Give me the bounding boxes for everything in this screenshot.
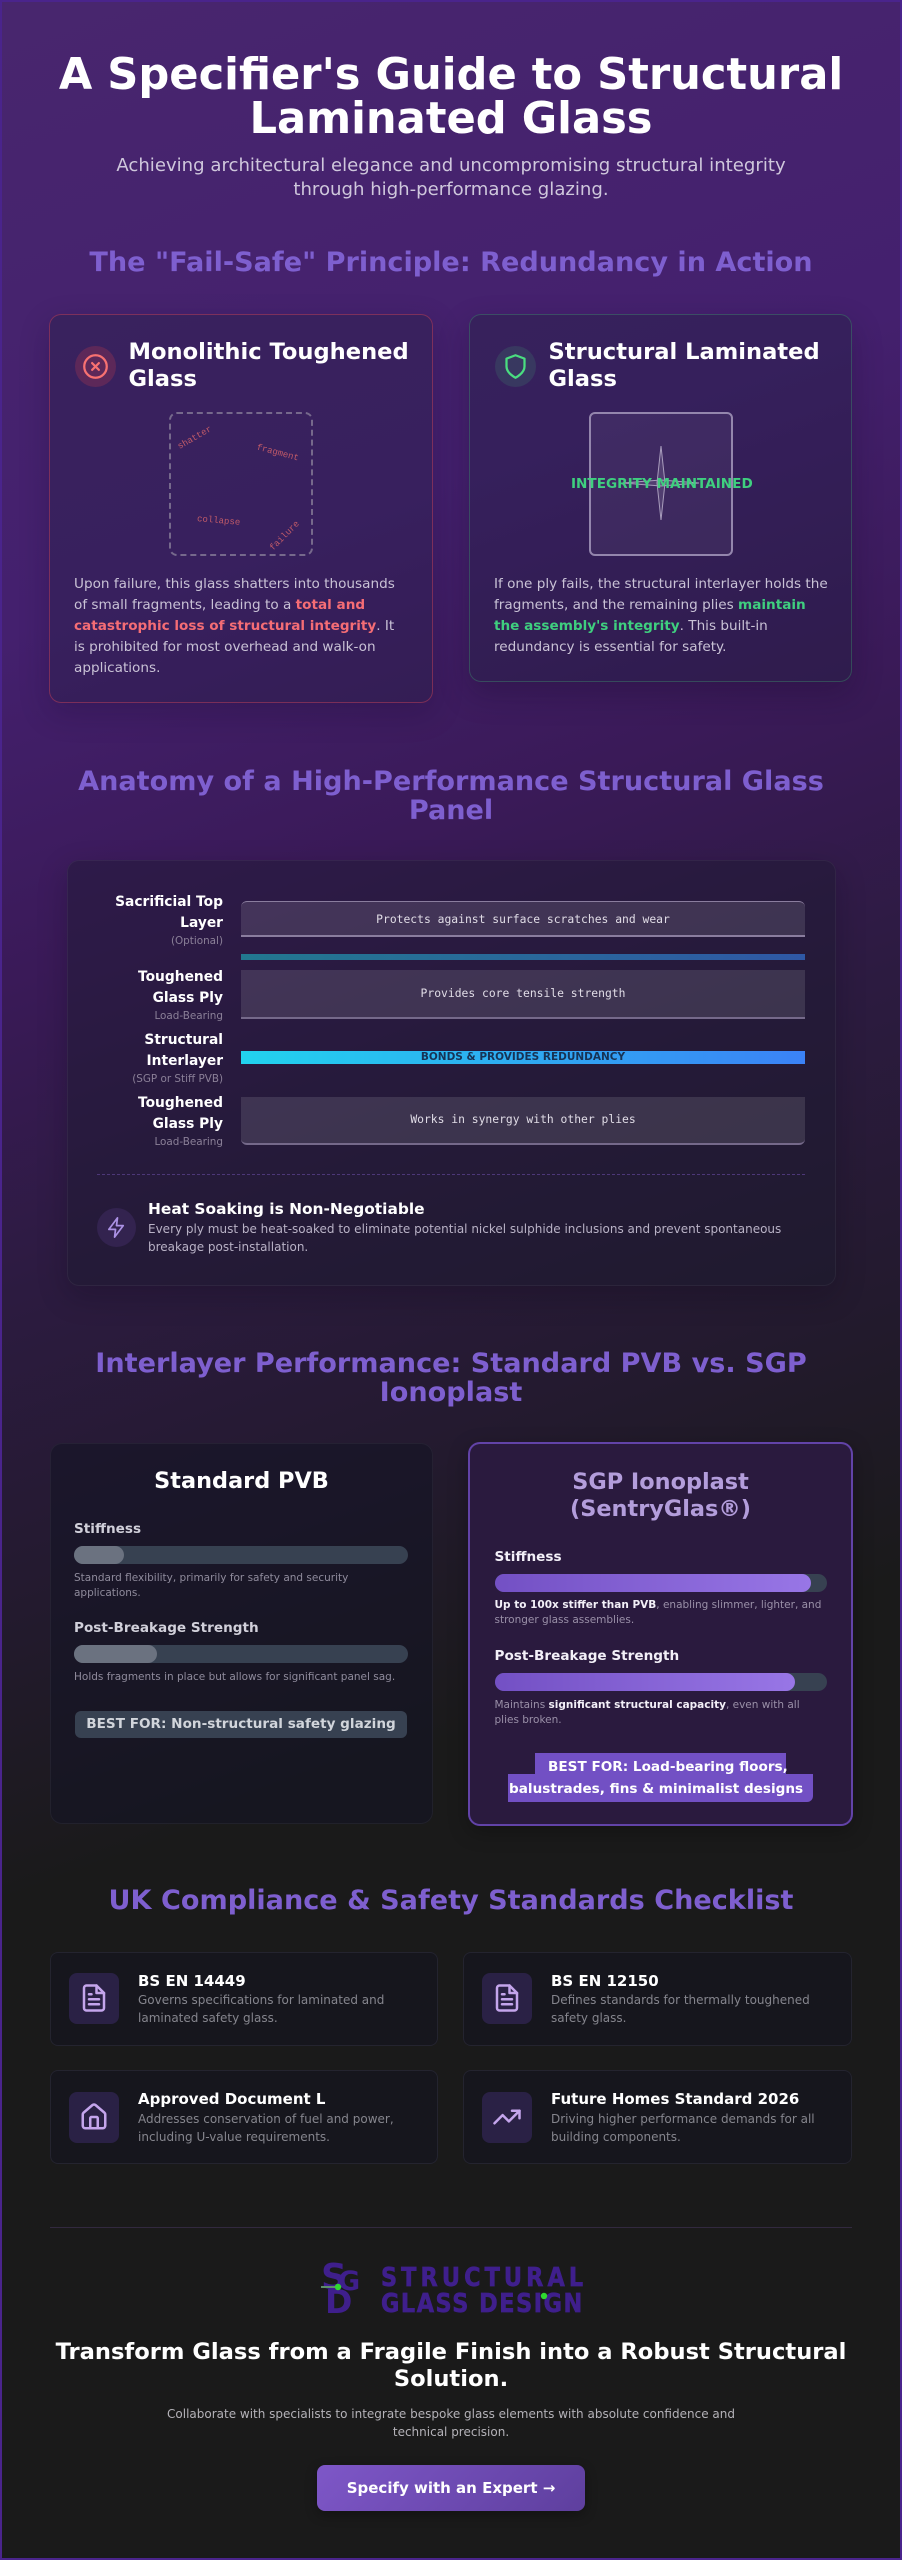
metric note: Maintains significant structural capacity, even with all [494, 1698, 800, 1710]
label: sacrificial top layer [115, 894, 223, 946]
callout text: Every ply must be heat-soaked to eliminate potential nickel sulphide inclusions and prevent spontaneous [148, 1222, 781, 1236]
metric label: post-breakage: Post-Breakage Strength [494, 1648, 679, 1664]
layer: lower ply: Works in synergy with other plies [410, 1112, 636, 1126]
description: If one ply fails, the structural interlayer holds the [494, 576, 828, 592]
description: the assembly's integrity. This built-in [494, 618, 768, 634]
layer: core ply: Provides core tensile strength [421, 986, 625, 1000]
layer: core ply [241, 970, 805, 1019]
heading: anatomy: Panel [409, 794, 493, 826]
bar: post-breakage [74, 1645, 408, 1663]
fragment label: shatter [176, 424, 214, 452]
closing heading: Solution. [394, 2366, 508, 2392]
subtitle [116, 154, 786, 200]
item text [138, 1993, 384, 2025]
label: toughened ply: Load-Bearing [154, 1136, 223, 1148]
badge: best for [75, 1711, 407, 1738]
icon: house [69, 2092, 119, 2143]
item text [138, 2112, 394, 2144]
label: sacrificial top layer: Sacrificial Top [115, 894, 223, 910]
layer: top ply: Protects against surface scratches and wear [376, 912, 670, 926]
icon: document [69, 1973, 119, 2024]
checklist item: BS EN 12150 [463, 1952, 852, 2046]
card title: Monolithic Toughened [128, 339, 409, 365]
panel: structural laminated glass [469, 314, 852, 682]
checklist item: future homes standard [463, 2070, 852, 2164]
callout title: Heat Soaking is Non-Negotiable [148, 1200, 425, 1218]
heading: interlayer performance [95, 1348, 807, 1408]
card title [548, 339, 820, 392]
layer: structural interlayer: BONDS & PROVIDES REDUNDANCY [421, 1051, 625, 1063]
logo: structural glass design: G [338, 2266, 360, 2297]
heading: compliance: UK Compliance & Safety Standards Checklist [109, 1884, 793, 1916]
panel: glass anatomy [67, 860, 836, 1286]
label: structural interlayer [132, 1032, 224, 1084]
description: is prohibited for most overhead and walk-on [74, 638, 376, 654]
label: structural interlayer: Interlayer [147, 1052, 223, 1068]
description: of small fragments, leading to a total and [74, 596, 365, 612]
panel title: (SentryGlas®) [570, 1496, 751, 1522]
description: redundancy is essential for safety. [494, 638, 726, 654]
title: Laminated Glass [249, 94, 653, 144]
label: toughened ply: Toughened [138, 1094, 223, 1110]
closing text [167, 2407, 735, 2439]
label: sacrificial top layer: Layer [180, 914, 223, 930]
metric note [74, 1572, 348, 1598]
closing heading [56, 2338, 846, 2392]
bar: stiffness [74, 1546, 408, 1564]
card title: Glass [128, 366, 197, 392]
icon: lightning [97, 1208, 136, 1247]
description [494, 576, 828, 654]
metric label: post-breakage: Post-Breakage Strength [74, 1620, 259, 1636]
heading: anatomy [78, 766, 824, 826]
crack lines [624, 446, 699, 520]
label: toughened ply [138, 968, 223, 1022]
item text [551, 2112, 815, 2144]
item text: safety glass. [551, 2011, 626, 2025]
metric note: Holds fragments in place but allows for significant panel sag. [74, 1670, 395, 1682]
item title: Future Homes Standard 2026 [551, 2090, 799, 2108]
fragment label: collapse [197, 514, 241, 528]
panel: SGP ionoplast [468, 1442, 853, 1826]
item title: BS EN 14449 [138, 1972, 246, 1990]
badge: best for [508, 1753, 813, 1802]
label: toughened ply: Load-Bearing [154, 1010, 223, 1022]
closing text: technical precision. [393, 2425, 509, 2439]
badge text: BEST FOR: Load-bearing floors, [548, 1759, 788, 1775]
diagram: intact glass [589, 412, 733, 556]
icon: document [482, 1973, 532, 2024]
title: A Specifier's Guide to Structural [59, 50, 843, 100]
card title: Structural Laminated [548, 339, 820, 365]
bar: post-breakage [494, 1673, 827, 1691]
description [74, 576, 395, 676]
metric note [494, 1698, 800, 1726]
item text: Addresses conservation of fuel and power, [138, 2112, 394, 2126]
logo: structural glass design: STRUCTURAL [381, 2261, 583, 2292]
label: toughened ply: Glass Ply [153, 990, 223, 1006]
panel: standard PVB [50, 1443, 433, 1824]
panel title: Standard PVB [154, 1468, 329, 1494]
fragment label: failure [268, 519, 302, 553]
card title [128, 339, 409, 392]
integrity label: INTEGRITY MAINTAINED [571, 476, 753, 492]
label: toughened ply: Toughened [138, 968, 223, 984]
label: toughened ply: Glass Ply [153, 1116, 223, 1132]
metric note [494, 1598, 821, 1626]
fragment label: fragment [255, 443, 300, 463]
metric note: Standard flexibility, primarily for safety and security [74, 1572, 348, 1584]
callout text [148, 1222, 781, 1254]
logo: structural glass design: S [321, 2258, 347, 2298]
icon: trending up [482, 2092, 532, 2143]
metric note: plies broken. [494, 1714, 562, 1726]
badge text [509, 1759, 803, 1797]
logo: structural glass design: GLASS DESIGN [381, 2287, 582, 2318]
button: specify with an expert [317, 2465, 585, 2511]
item text: Governs specifications for laminated and [138, 1993, 384, 2007]
subtitle: through high-performance glazing. [293, 178, 609, 200]
icon: x in circle [75, 346, 116, 387]
label: structural interlayer: Structural [144, 1032, 223, 1048]
heading: interlayer performance: Ionoplast [380, 1376, 522, 1408]
badge text: balustrades, fins & minimalist designs [509, 1781, 803, 1797]
button: specify with an expert: Specify with an Expert → [347, 2479, 555, 2497]
icon: shield [495, 346, 536, 387]
panel: monolithic toughened glass [49, 314, 433, 703]
layer: top ply [241, 901, 805, 937]
item text: Driving higher performance demands for all [551, 2112, 815, 2126]
item title: BS EN 12150 [551, 1972, 659, 1990]
description: fragments, and the remaining plies maintain [494, 596, 806, 612]
bar: stiffness [494, 1574, 827, 1592]
metric note: applications. [74, 1586, 141, 1598]
subtitle: Achieving architectural elegance and uncompromising structural integrity [116, 154, 786, 176]
logo: structural glass design [321, 2258, 583, 2318]
heading: anatomy: Anatomy of a High-Performance Structural Glass [78, 766, 824, 796]
description: catastrophic loss of structural integrity. It [74, 618, 394, 634]
metric note: Up to 100x stiffer than PVB, enabling slimmer, lighter, and [494, 1598, 821, 1610]
metric label: stiffness: Stiffness [494, 1549, 562, 1565]
item text: building components. [551, 2130, 681, 2144]
card title: Glass [548, 366, 617, 392]
layer: lower ply [241, 1097, 805, 1145]
description: Upon failure, this glass shatters into thousands [74, 576, 395, 592]
metric label: stiffness: Stiffness [74, 1521, 141, 1537]
metric note: stronger glass assemblies. [494, 1614, 634, 1626]
description: applications. [74, 660, 160, 676]
label: sacrificial top layer: (Optional) [171, 934, 223, 946]
callout text: breakage post-installation. [148, 1240, 308, 1254]
label: toughened ply [138, 1094, 223, 1148]
closing heading: Transform Glass from a Fragile Finish into a Robust Structural [56, 2338, 846, 2364]
item title: Approved Document L [138, 2090, 325, 2108]
panel title: SGP Ionoplast [572, 1468, 749, 1494]
diagram: shattered glass [169, 412, 313, 556]
item text [551, 1993, 810, 2025]
callout: heat soaking [148, 1200, 781, 1254]
heading: fail-safe principle: The "Fail-Safe" Principle: Redundancy in Action [89, 247, 813, 278]
layer: structural interlayer [241, 1051, 805, 1064]
item text: including U-value requirements. [138, 2130, 330, 2144]
heading: interlayer performance: Interlayer Performance: Standard PVB vs. SGP [95, 1348, 807, 1378]
item text: Defines standards for thermally toughened [551, 1993, 810, 2007]
panel title [570, 1468, 751, 1522]
badge: best for: BEST FOR: Non-structural safety glazing [86, 1716, 396, 1732]
layer: thin interlayer [241, 954, 805, 960]
label: structural interlayer: (SGP or Stiff PVB) [132, 1072, 223, 1084]
item text: laminated safety glass. [138, 2011, 278, 2025]
closing text: Collaborate with specialists to integrate bespoke glass elements with absolute confidence and [167, 2407, 735, 2421]
checklist item: approved document L [50, 2070, 438, 2164]
checklist item: BS EN 14449 [50, 1952, 438, 2046]
title [59, 50, 843, 144]
